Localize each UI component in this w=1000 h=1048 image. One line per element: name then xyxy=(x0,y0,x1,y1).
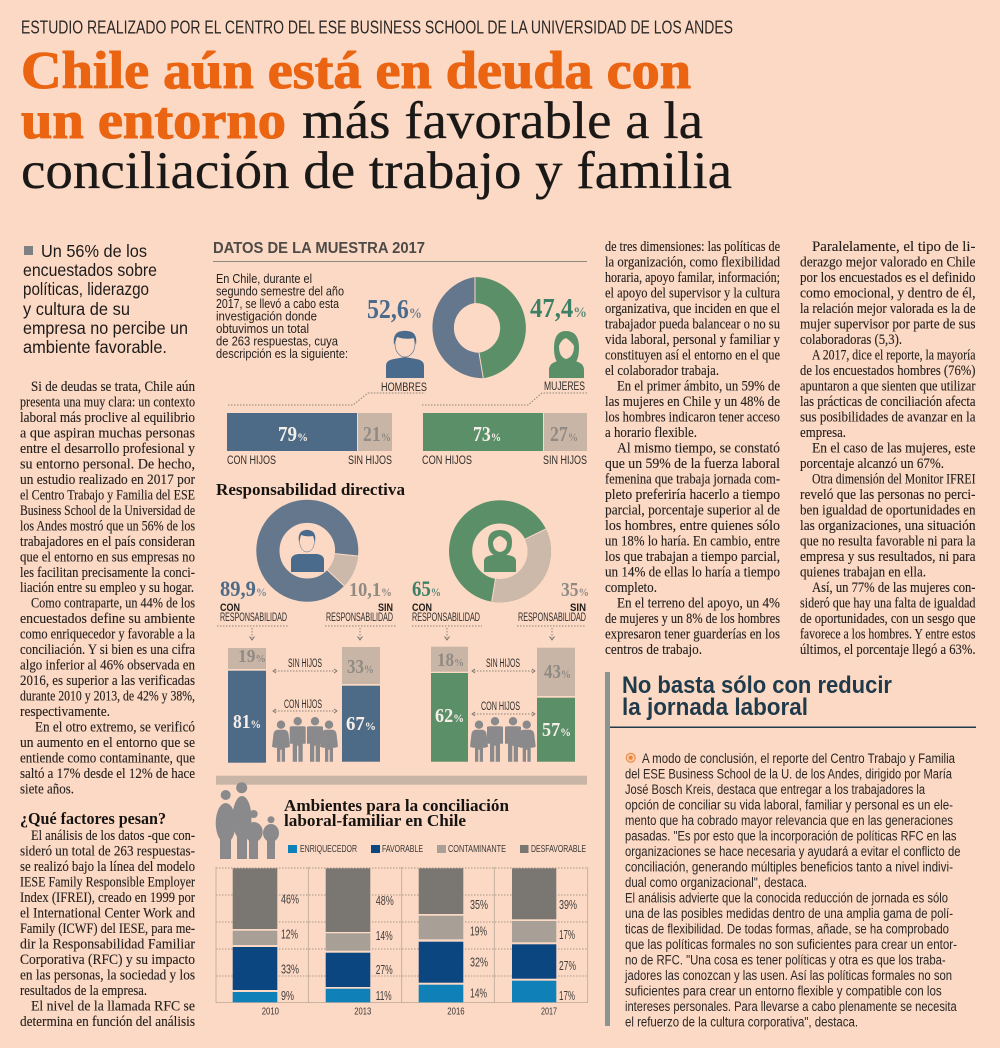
body text: column 3: trabajador pueda balancear o no su xyxy=(605,316,780,332)
stacked bar: 2010: 46% xyxy=(281,892,299,906)
intro text: obtuvimos un total xyxy=(216,321,309,336)
body text: column 1: un estudio realizado en 2017 por xyxy=(20,472,195,488)
stacked bar: 2017: 17% xyxy=(559,988,575,1003)
chart grid xyxy=(216,867,588,1003)
body text: column 1: que el entorno en sus empresas no xyxy=(20,550,195,566)
body text: column 3: de mujeres y un 8% de los hombres xyxy=(605,611,780,627)
body text: column 3: los que trabajan a tiempo parcial, xyxy=(605,549,780,565)
stacked bar: 2013 xyxy=(326,868,394,1017)
intro text: En Chile, durante el xyxy=(216,271,312,286)
stacked bar: 2010 xyxy=(233,868,299,1017)
body text: column 1: Business School de la Universidad de xyxy=(20,503,195,519)
body text: column 1: 2016, es superior a las verificadas xyxy=(20,673,195,689)
body text: column 3: los hombres indicaron tener acceso xyxy=(605,410,780,426)
title: un entorno xyxy=(21,92,286,150)
box text: ticas de flexibilidad. De todas formas, añade, se ha comprobado xyxy=(625,922,949,936)
body text: column 3: centros de trabajo. xyxy=(605,642,702,658)
intro text: investigación donde xyxy=(216,308,317,324)
heading: ambientes xyxy=(284,796,510,830)
bars: sin responsabilidad mujeres xyxy=(537,648,575,762)
body text: column 3: el colaborador trabaja. xyxy=(605,363,719,379)
legend: FAVORABLE xyxy=(382,843,423,855)
box heading rule xyxy=(610,726,976,728)
body text: column 1: su entorno personal. De hecho, xyxy=(20,456,195,472)
heading: ambientes: Ambientes para la conciliación xyxy=(284,796,510,815)
legend: ENRIQUECEDOR xyxy=(300,843,357,855)
body text: factores: determina en función del análisis xyxy=(20,1014,195,1030)
body text: column 3: la organización, como flexibilidad xyxy=(605,254,780,270)
body text: column 1: liación entre su empleo y su hogar. xyxy=(20,580,194,596)
legend xyxy=(288,843,586,855)
body text: column 3: parcial, porcentaje superior al de xyxy=(605,502,780,518)
legend: CONTAMINANTE xyxy=(448,843,506,855)
icon: family group 2 xyxy=(470,717,536,762)
icon: hombre xyxy=(386,331,424,378)
body text: column 3: que un 59% de la fuerza laboral xyxy=(605,456,780,472)
bars: sin responsabilidad mujeres: 57% xyxy=(542,719,571,741)
body text: column 1: un aumento en el entorno que se xyxy=(20,735,195,751)
stats and labels: responsabilidad hombres: 89,9% xyxy=(220,576,267,601)
legend: DESFAVORABLE xyxy=(531,843,586,855)
icon: family group 1 xyxy=(272,717,338,762)
bar: hombres con y sin hijos: 21% xyxy=(363,422,391,446)
body text: column 3 xyxy=(605,239,780,658)
body text: column 1: saltó a 17% desde el 12% de hace xyxy=(20,766,195,782)
pull quote: Un 56% de los xyxy=(41,241,147,261)
body text: column 1: a que aspiran muchas personas xyxy=(20,426,195,442)
body text: factores: dir la Responsabilidad Familiar xyxy=(20,936,195,952)
stats and labels: responsabilidad mujeres: RESPONSABILIDAD xyxy=(412,612,480,624)
body text: factores: Family (ICWF) del IESE, para me- xyxy=(20,921,195,937)
body text: column 3: un 14% de ellas lo haría a tiempo xyxy=(605,564,780,580)
stacked bar: 2016: 19% xyxy=(470,924,487,939)
body text: column 3: de tres dimensiones: las políticas de xyxy=(605,239,780,255)
body text: column 3: horaria, apoyo familar, información; xyxy=(605,270,780,286)
body text: column 1: laboral más proclive al equilibrio xyxy=(20,410,195,426)
labels: sin y con hijos hombres: SIN HIJOS xyxy=(288,658,322,670)
body text: column 4: las organizaciones, una situación xyxy=(800,518,976,534)
stacked bar: 2017: 27% xyxy=(559,958,576,973)
body text: column 3: el apoyo del supervisor y la cultura xyxy=(605,286,780,302)
bars: con responsabilidad mujeres: 18% xyxy=(437,650,464,671)
stats and labels: responsabilidad hombres: RESPONSABILIDAD xyxy=(220,612,287,624)
box rule xyxy=(605,672,610,1026)
stacked bar: 2013: 48% xyxy=(376,893,394,908)
body text: factores: el International Center Work and xyxy=(20,906,195,922)
labels: sin y con hijos hombres xyxy=(273,658,337,713)
body text: column 4 xyxy=(800,239,976,658)
bars: con responsabilidad mujeres: 62% xyxy=(435,705,464,727)
bars: con responsabilidad hombres: 19% xyxy=(238,646,266,666)
body text: column 3: los hombres, entre quienes sólo xyxy=(605,518,780,534)
body text: column 3: un 18% lo haría. En cambio, entre xyxy=(605,534,780,550)
bars: sin responsabilidad hombres xyxy=(342,647,380,762)
body text: factores: en las personas, la sociedad y los xyxy=(20,968,195,984)
stacked bar: 2013: 14% xyxy=(376,928,393,943)
stacked bar: 2017: 2017 xyxy=(541,1005,557,1017)
stat: mujeres 47,4%: 47,4% xyxy=(530,293,587,323)
stacked bar: 2017: 17% xyxy=(559,927,575,942)
body text: column 1: conciliación. Y si bien es una cifra xyxy=(20,642,195,658)
body text: column 3: vida laboral, personal y familiar y xyxy=(605,332,780,348)
box text: dual como organizacional", destaca. xyxy=(625,875,807,890)
icon: mujer xyxy=(549,331,584,378)
box text: no de RFC. "Una cosa es tener políticas y otra es que los traba- xyxy=(625,952,946,968)
bars: con responsabilidad hombres xyxy=(228,646,266,763)
body text: column 4: reveló que las personas no perci- xyxy=(800,487,976,503)
body text: column 3: completo. xyxy=(605,580,657,596)
body text: column 3: En el terreno del apoyo, un 4% xyxy=(617,596,780,612)
bar: mujeres con y sin hijos xyxy=(422,413,587,467)
connector: hombres xyxy=(228,393,425,405)
stats and labels: responsabilidad mujeres: SIN xyxy=(570,602,586,614)
body text: column 1: los Andes mostró que un 56% de los xyxy=(20,518,195,534)
bars: sin responsabilidad mujeres: 43% xyxy=(544,661,571,683)
arrows: down from labels xyxy=(217,626,585,640)
stats and labels: responsabilidad hombres: RESPONSABILIDAD xyxy=(326,612,393,624)
body text: column 1: entiende como contaminante, que xyxy=(20,750,195,766)
stacked bar: 2017 xyxy=(512,868,577,1017)
box text: José Bosch Kreis, destaca que entregar a los trabajadores la xyxy=(625,782,925,797)
label: mujeres: MUJERES xyxy=(544,381,585,393)
body text: column 1: presenta una muy clara: un contexto xyxy=(20,394,195,410)
body text: column 1: En el otro extremo, se verificó xyxy=(35,720,195,736)
body text: factores: Corporativa (RFC) y su impacto xyxy=(20,952,195,968)
title: más favorable a la xyxy=(302,92,703,150)
stats and labels: responsabilidad mujeres: RESPONSABILIDAD xyxy=(518,612,586,624)
stat: hombres 52,6%: 52,6% xyxy=(367,294,422,324)
bars: con responsabilidad hombres: 81% xyxy=(233,711,261,733)
body text: column 3: a horario flexible. xyxy=(605,425,697,441)
stats and labels: responsabilidad mujeres: 65% xyxy=(412,576,441,601)
body text: factores: El análisis de los datos -que con- xyxy=(31,828,195,844)
bar: hombres con y sin hijos: CON HIJOS xyxy=(227,455,276,467)
stats and labels: responsabilidad mujeres xyxy=(412,576,589,624)
body text: column 4: porcentaje alcanzó un 67%. xyxy=(800,456,944,472)
subheading: Qué factores pesan: ¿Qué factores pesan? xyxy=(20,809,166,828)
stacked bar: 2016: 35% xyxy=(470,897,488,912)
labels: sin y con hijos mujeres: SIN HIJOS xyxy=(486,658,520,670)
intro text: descripción es la siguiente: xyxy=(216,346,348,361)
kicker: ESTUDIO REALIZADO POR EL CENTRO DEL ESE BUSINESS SCHOOL DE LA UNIVERSIDAD DE LOS ANDES xyxy=(21,18,733,38)
box heading xyxy=(622,672,892,721)
stacked bar: 2016 xyxy=(419,868,488,1017)
body text: factores: sideró un total de 263 respuestas- xyxy=(20,844,195,860)
divider band xyxy=(216,776,587,785)
body text: column 4: ben igualdad de oportunidades en xyxy=(800,502,976,518)
stacked bar: 2016: 14% xyxy=(470,986,487,1001)
stacked bar: 2010: 33% xyxy=(281,962,299,976)
intro text: segundo semestre del año xyxy=(216,284,344,298)
stacked bar: 2010: 12% xyxy=(281,926,298,942)
stacked bar: 2013: 2013 xyxy=(354,1005,371,1017)
bar: mujeres con y sin hijos: CON HIJOS xyxy=(422,455,472,467)
labels: sin y con hijos mujeres xyxy=(472,658,535,716)
body text: column 1: el Centro Trabajo y Familia del ESE xyxy=(20,488,195,504)
box text: el refuerzo de la cultura corporativa", destaca. xyxy=(625,1014,858,1030)
body text: column 3: las mujeres en Chile y un 48% de xyxy=(605,394,780,410)
heading: ambientes: laboral-familiar en Chile xyxy=(284,811,466,830)
bar: hombres con y sin hijos xyxy=(227,413,392,467)
body text: column 1: respectivamente. xyxy=(20,704,110,720)
icon: family silhouettes xyxy=(216,782,279,859)
connector: mujeres xyxy=(422,393,587,405)
label: hombres: HOMBRES xyxy=(381,382,427,394)
bars: sin responsabilidad hombres: 67% xyxy=(346,713,376,735)
intro text: 2017, se llevó a cabo esta xyxy=(216,296,340,311)
stacked bar: 2013: 11% xyxy=(376,988,392,1003)
pull quote: encuestados sobre xyxy=(23,260,157,280)
body text: column 4: empresa. xyxy=(800,425,846,441)
stats and labels: responsabilidad hombres: CON xyxy=(220,602,240,614)
pull quote: políticas, liderazgo xyxy=(23,279,149,299)
body text: column 1: Si de deudas se trata, Chile aún xyxy=(31,379,195,395)
body text: column 4: En el caso de las mujeres, este xyxy=(812,440,976,456)
body text: column 1: algo inferior al 46% observada en xyxy=(20,658,195,674)
box text xyxy=(624,751,960,1030)
bars: sin responsabilidad hombres: 33% xyxy=(347,656,374,678)
stats and labels: responsabilidad mujeres: CON xyxy=(412,602,432,614)
pull quote: empresa no percibe un xyxy=(23,318,188,338)
box text: conciliación, generando múltiples beneficios tanto a nivel indivi- xyxy=(625,860,953,874)
donut: hombres y mujeres xyxy=(432,277,526,378)
body text: column 3: organizativa, que inciden en que el xyxy=(605,301,780,317)
body text: factores: IESE Family Responsible Employer xyxy=(20,874,195,890)
bar: mujeres con y sin hijos: 27% xyxy=(550,422,578,446)
body text: column 1: como enriquecedor y favorable a la xyxy=(20,626,195,642)
body text: factores: resultados de la empresa. xyxy=(20,983,147,999)
body text: column 4: la relación mejor valorada es la de xyxy=(800,301,976,317)
body text: column 4: derazgo mejor valorado en Chile xyxy=(800,254,976,270)
body text: column 1: entre el desarrollo profesional y xyxy=(20,441,195,457)
body text: column 3: constituyen así el entorno en el que xyxy=(605,348,780,364)
body text: column 4: por los encuestados es el definido xyxy=(800,270,976,286)
pull quote xyxy=(23,241,188,357)
body text: column 4: quienes trabajan en ella. xyxy=(800,564,926,580)
body text: column 4: como emocional, y dentro de él, xyxy=(800,286,976,302)
labels: sin y con hijos hombres: CON HIJOS xyxy=(284,699,322,711)
stats and labels: responsabilidad hombres xyxy=(220,576,393,624)
box text: suficientes para crear un entorno flexible y compatible con los xyxy=(625,984,942,998)
body text: column 3: femenina que trabaja jornada com- xyxy=(605,472,780,488)
title: Chile aún está en deuda con xyxy=(21,42,691,100)
body text: column 4: mujer supervisor por parte de sus xyxy=(800,316,976,332)
bar: hombres con y sin hijos: SIN HIJOS xyxy=(348,455,392,467)
title xyxy=(21,42,732,200)
body text: column 1: trabajadores en el país consideran xyxy=(20,534,195,550)
body text: column 1: encuestados define su ambiente xyxy=(20,611,195,627)
intro text: de 263 respuestas, cuya xyxy=(216,334,339,348)
body text: factores: se realizó bajo la línea del modelo xyxy=(20,859,195,875)
box heading: la jornada laboral xyxy=(622,694,808,721)
body text: factores xyxy=(20,828,195,1030)
donut: responsabilidad mujeres xyxy=(461,512,551,602)
body text: column 3: pleto preferiría hacerlo a tiempo xyxy=(605,487,780,503)
body text: column 3: En el primer ámbito, un 59% de xyxy=(617,378,780,394)
section heading: datos de la muestra: DATOS DE LA MUESTRA 2017 xyxy=(213,240,425,257)
box text: opción de conciliar su vida laboral, familiar y personal es un ele- xyxy=(625,798,953,812)
stats and labels: responsabilidad mujeres: 35% xyxy=(561,579,589,601)
bars: con responsabilidad mujeres xyxy=(431,647,468,762)
body text: column 3: Al mismo tiempo, se constató xyxy=(617,440,780,456)
stats and labels: responsabilidad hombres: 10,1% xyxy=(349,579,392,601)
bar: hombres con y sin hijos: 79% xyxy=(278,422,308,446)
body text: column 4: que no resulta favorable ni para la xyxy=(800,534,976,550)
stacked bar: 2013: 27% xyxy=(376,962,393,977)
panel: conclusion box xyxy=(605,672,976,1030)
stacked bar: 2017: 39% xyxy=(559,897,577,912)
body text: column 4: Paralelamente, el tipo de li- xyxy=(812,239,976,255)
body text: column 1 xyxy=(20,379,195,798)
body text: column 4: empresa y sus resultados, ni para xyxy=(800,549,976,565)
labels: sin y con hijos mujeres: CON HIJOS xyxy=(481,701,520,713)
icon: bullet xyxy=(626,753,635,762)
bar: mujeres con y sin hijos: SIN HIJOS xyxy=(543,455,587,467)
body text: column 1: durante 2010 y 2013, de 42% y 38%, xyxy=(20,688,195,704)
body text: column 4: colaboradoras (5,3). xyxy=(800,332,902,348)
pull quote: ambiente favorable. xyxy=(23,337,167,357)
title: conciliación de trabajo y familia xyxy=(21,142,732,200)
stacked bar: 2016: 2016 xyxy=(447,1005,465,1017)
stats and labels: responsabilidad hombres: SIN xyxy=(378,602,393,614)
body text: factores: Index (IFREI), creado en 1999 por xyxy=(20,890,195,906)
body text: column 3: expresaron tener guarderías en los xyxy=(605,626,780,642)
intro text xyxy=(216,271,348,361)
stacked bar: 2010: 2010 xyxy=(262,1005,279,1017)
bar: mujeres con y sin hijos: 73% xyxy=(473,422,501,446)
donut: responsabilidad hombres xyxy=(268,511,358,590)
body text: column 4: sus posibilidades de avanzar en la xyxy=(800,410,976,426)
stacked bar: 2010: 9% xyxy=(281,988,294,1003)
body text: column 1: Como contraparte, un 44% de los xyxy=(31,596,195,612)
box heading: No basta sólo con reducir xyxy=(622,672,892,699)
stacked bar: 2016: 32% xyxy=(470,955,488,970)
heading: responsabilidad directiva: Responsabilidad directiva xyxy=(216,480,405,499)
body text: factores: El nivel de la llamada RFC se xyxy=(31,998,195,1014)
pull quote: y cultura de su xyxy=(23,299,130,319)
body text: column 1: siete años. xyxy=(20,782,74,798)
body text: column 1: les facilitan precisamente la conci- xyxy=(20,565,195,581)
